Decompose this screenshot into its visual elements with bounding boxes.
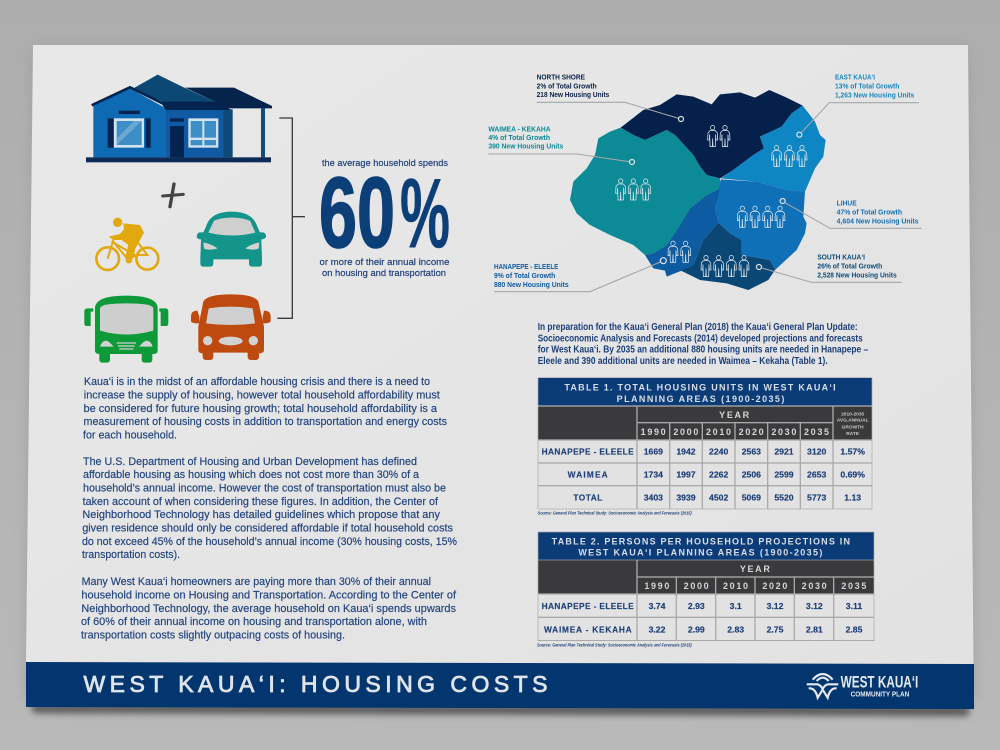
table 2 column headers: 2010	[723, 581, 750, 591]
callout lead-in text: the average household spends	[322, 158, 448, 169]
table 2 row: waimea kekaha: 2.83	[727, 624, 744, 634]
banner title: WEST KAUA‘I: HOUSING COSTS	[84, 671, 548, 697]
icon: orange van	[191, 294, 271, 360]
text block: housing affordability: household income on Housing and Transportation. According to the Center of	[81, 590, 457, 602]
text block: general plan introduction: Socioeconomic Analysis and Forecasts (2014) developed projections and forecasts	[538, 333, 863, 344]
text block: housing affordability	[81, 376, 457, 642]
table 1 row: waimea: 1734	[644, 470, 663, 480]
label: waimea kekaha	[488, 125, 563, 151]
text block: housing affordability: measurement of housing costs in addition to transportation and energy costs	[84, 416, 447, 428]
table 1 row: hanapepe eleele: HANAPEPE - ELEELE	[542, 447, 634, 457]
table 1 column headers: 1990	[641, 427, 667, 437]
table 1 row: total: 5773	[807, 492, 826, 502]
text block: housing affordability: The U.S. Department of Housing and Urban Development has defined	[83, 456, 417, 468]
label: hanapepe eleele	[494, 263, 569, 289]
text block: housing affordability: do not exceed 45% of the household’s annual income (30% housing costs, 15%	[82, 536, 457, 548]
label: lihue: 47% of Total Growth	[837, 209, 902, 217]
table 2 column headers: 1990	[644, 581, 671, 591]
table 2 column headers: YEAR	[740, 564, 771, 574]
table 1 row: total: 5069	[742, 492, 761, 502]
text block: housing affordability: be considered for future housing growth; total household affordability is a	[84, 403, 438, 415]
icon: plus sign	[163, 184, 183, 207]
label: north shore: 218 New Housing Units	[537, 91, 609, 99]
table 2 row: hanapepe eleele: 3.1	[730, 601, 742, 611]
table 2 row: waimea kekaha: 2.99	[688, 624, 705, 634]
text block: general plan introduction: for West Kaua‘i. By 2035 an additional 880 housing units are needed in Hanapepe –	[538, 345, 869, 356]
people icons	[616, 125, 807, 277]
icon: bicycle	[96, 218, 158, 270]
region: south kauai	[681, 223, 775, 290]
label: lihue	[837, 200, 919, 225]
table 1 row: hanapepe eleele: 1.57%	[840, 447, 865, 457]
text block: housing affordability: increase the supply of housing, however total household affordability must	[84, 390, 440, 402]
logo wordmark: WEST KAUA‘I	[841, 673, 918, 692]
text block: housing affordability: Neighborhood Technology, the average household on Kaua‘i spends upwards	[81, 603, 456, 615]
table 1 row: total: 4502	[709, 492, 728, 502]
label: east kauai	[835, 73, 914, 100]
table 1 row: total: TOTAL	[573, 492, 602, 502]
table 2 row: hanapepe eleele: 2.93	[688, 601, 705, 611]
table 1 row: total: 3939	[676, 492, 696, 502]
label: east kauai: EAST KAUA‘I	[835, 73, 875, 81]
table 2 column headers: 2000	[684, 581, 710, 591]
table 1 row: hanapepe eleele: 2563	[742, 447, 761, 457]
text block: housing affordability: transportation costs).	[82, 549, 180, 561]
table 2: persons per household	[537, 532, 874, 648]
label: east kauai: 1,263 New Housing Units	[835, 92, 914, 100]
table 1 row: hanapepe eleele: 3120	[807, 447, 826, 457]
region: east kauai	[721, 106, 826, 192]
table 1 row: waimea: 0.69%	[840, 470, 865, 480]
table 1 row: waimea: WAIMEA	[568, 470, 608, 480]
table 1 row: waimea: 2599	[774, 470, 794, 480]
table 2 row: waimea kekaha: WAIMEA - KEKAHA	[544, 624, 632, 634]
table 2 source: Source: General Plan Technical Study: Socioeconomic Analysis and Forecasts (2015)	[537, 643, 692, 648]
map of West Kauai planning areas	[488, 73, 922, 292]
table 2 row: waimea kekaha: 2.85	[846, 624, 863, 634]
text block: general plan introduction	[538, 322, 869, 367]
table 1 row: waimea: 2653	[807, 470, 826, 480]
table 1 column headers: YEAR	[719, 410, 751, 420]
table 1 row: hanapepe eleele: 1669	[644, 447, 663, 457]
text block: housing affordability: given residence should only be considered affordable if total household costs	[82, 522, 453, 534]
table 2 column headers: 2020	[762, 581, 789, 591]
table 1 row: waimea: 2262	[709, 470, 728, 480]
text block: housing affordability: for each household.	[83, 430, 177, 442]
table 2 title: TABLE 2. PERSONS PER HOUSEHOLD PROJECTIONS IN	[552, 537, 850, 547]
icon: teal car	[197, 212, 266, 267]
label: hanapepe eleele: 880 New Housing Units	[494, 281, 569, 289]
callout: 60 percent	[319, 157, 450, 279]
text block: general plan introduction: Eleele and 390 additional units are needed in Waimea – Kekaha (Table 1).	[538, 356, 828, 367]
table 1 column headers: 2000	[673, 427, 700, 437]
text block: housing affordability: Neighborhood Technology has detailed guidelines which propose that any	[82, 509, 440, 521]
table 1 row: total: 3403	[644, 492, 663, 502]
text block: housing affordability: affordable housing as housing which does not cost more than 30% of a	[83, 469, 420, 481]
table 2 row: hanapepe eleele: 3.74	[649, 601, 666, 611]
poster sheet	[26, 45, 974, 664]
label: lihue: 4,604 New Housing Units	[837, 217, 919, 225]
callout follow-up text: or more of their annual income	[320, 257, 450, 268]
table 2 row: hanapepe eleele: 3.12	[806, 601, 823, 611]
label: east kauai: 13% of Total Growth	[835, 82, 899, 90]
table 2 row: hanapepe eleele: 3.11	[846, 601, 862, 611]
label: south kauai: 26% of Total Growth	[817, 263, 882, 271]
table 1 column headers: RATE	[846, 431, 860, 437]
table 1 row: total: 1.13	[844, 492, 861, 502]
label: waimea kekaha: 4% of Total Growth	[488, 134, 550, 142]
table 2 row: hanapepe eleele	[538, 595, 874, 617]
table 2 row: hanapepe eleele: HANAPEPE - ELEELE	[542, 601, 634, 611]
region: hanapepe eleele	[645, 188, 720, 277]
table 1 column headers: 2010-2035	[841, 411, 865, 417]
table 1 row: total: 5520	[774, 492, 794, 502]
table 2 row: waimea kekaha	[538, 618, 874, 640]
table 1 row: waimea: 1997	[676, 470, 696, 480]
region: waimea kekaha	[570, 128, 720, 255]
bracket	[277, 118, 305, 318]
text block: housing affordability: Many West Kaua‘i homeowners are paying more than 30% of their annual	[82, 576, 431, 588]
label: hanapepe eleele: 9% of Total Growth	[494, 272, 555, 280]
table 2 row: waimea kekaha: 3.22	[649, 624, 666, 634]
leader lines	[488, 102, 922, 292]
label: north shore: 2% of Total Growth	[537, 82, 597, 90]
text block: general plan introduction: In preparation for the Kaua‘i General Plan (2018) the Kaua‘i General Plan Update:	[538, 322, 858, 333]
table 2 row: hanapepe eleele: 3.12	[767, 601, 784, 611]
label: lihue: LIHUE	[837, 200, 857, 208]
label: north shore	[537, 73, 609, 99]
table 1 source: Source: General Plan Technical Study: Socioeconomic Analysis and Forecasts (2015)	[538, 510, 692, 515]
table 1 column headers: GROWTH	[842, 424, 864, 430]
table 1 title: TABLE 1. TOTAL HOUSING UNITS IN WEST KAUA‘I	[564, 383, 836, 393]
text block: housing affordability: transportation costs slightly outpacing costs of housing.	[81, 630, 345, 642]
table 1 column headers: 2035	[804, 427, 831, 437]
label: north shore: NORTH SHORE	[537, 73, 585, 81]
big number: 60	[319, 157, 395, 269]
region: north shore	[621, 90, 803, 178]
text block: housing affordability: taken account of when considering these figures. In addition, the Center of	[83, 496, 439, 508]
region: lihue	[715, 179, 807, 270]
table 1 column headers: 2030	[771, 427, 798, 437]
logo icon	[807, 674, 838, 698]
icon: house	[86, 75, 272, 162]
table 2 row: waimea kekaha: 2.81	[806, 624, 823, 634]
table 1 row: waimea: 2506	[742, 470, 761, 480]
label: hanapepe eleele: HANAPEPE - ELEELE	[494, 263, 559, 271]
table 1 column headers: 2020	[739, 427, 765, 437]
table 1 row: total	[538, 486, 872, 509]
label: south kauai: 2,528 New Housing Units	[817, 271, 897, 279]
table 2 title	[538, 532, 874, 560]
logo: West Kauai Community Plan	[807, 673, 918, 698]
table 1 title	[538, 378, 872, 405]
big number: %	[400, 158, 450, 268]
label: south kauai: SOUTH KAUA‘I	[817, 253, 865, 261]
callout follow-up text	[320, 257, 450, 279]
table 2 row: waimea kekaha: 2.75	[767, 624, 784, 634]
table 1 row: hanapepe eleele: 1942	[676, 447, 696, 457]
table 2 title: WEST KAUA‘I PLANNING AREAS (1900-2035)	[578, 548, 822, 558]
table 1 row: hanapepe eleele: 2240	[709, 447, 728, 457]
table 1 column headers	[538, 407, 872, 439]
label: waimea kekaha: 390 New Housing Units	[488, 143, 563, 151]
table 1: total housing units	[538, 377, 872, 515]
table 1 column headers: 2010	[706, 427, 733, 437]
table 2 column headers: 2035	[841, 581, 868, 591]
table 2 column headers: 2030	[802, 581, 828, 591]
table 1 row: hanapepe eleele: 2921	[774, 447, 794, 457]
table 1 column headers: AVG.ANNUAL	[837, 418, 869, 424]
logo tagline: COMMUNITY PLAN	[851, 691, 909, 698]
label: waimea kekaha: WAIMEA - KEKAHA	[488, 125, 551, 133]
icon: green bus	[84, 296, 168, 363]
label: south kauai	[817, 253, 897, 279]
table 1 row: waimea	[538, 464, 872, 485]
table 2 column headers	[538, 560, 874, 593]
table 1 row: hanapepe eleele	[538, 441, 872, 462]
text block: housing affordability: household’s annual income. However the cost of transportation must also be	[83, 482, 446, 494]
table 1 title: PLANNING AREAS (1900-2035)	[617, 394, 784, 404]
text block: housing affordability: Kaua‘i is in the midst of an affordable housing crisis and there is a need to	[84, 376, 430, 388]
text block: housing affordability: of 60% of their annual income on housing and transportation alone, with	[81, 616, 427, 628]
footer banner	[26, 662, 974, 709]
callout follow-up text: on housing and transportation	[322, 268, 446, 279]
